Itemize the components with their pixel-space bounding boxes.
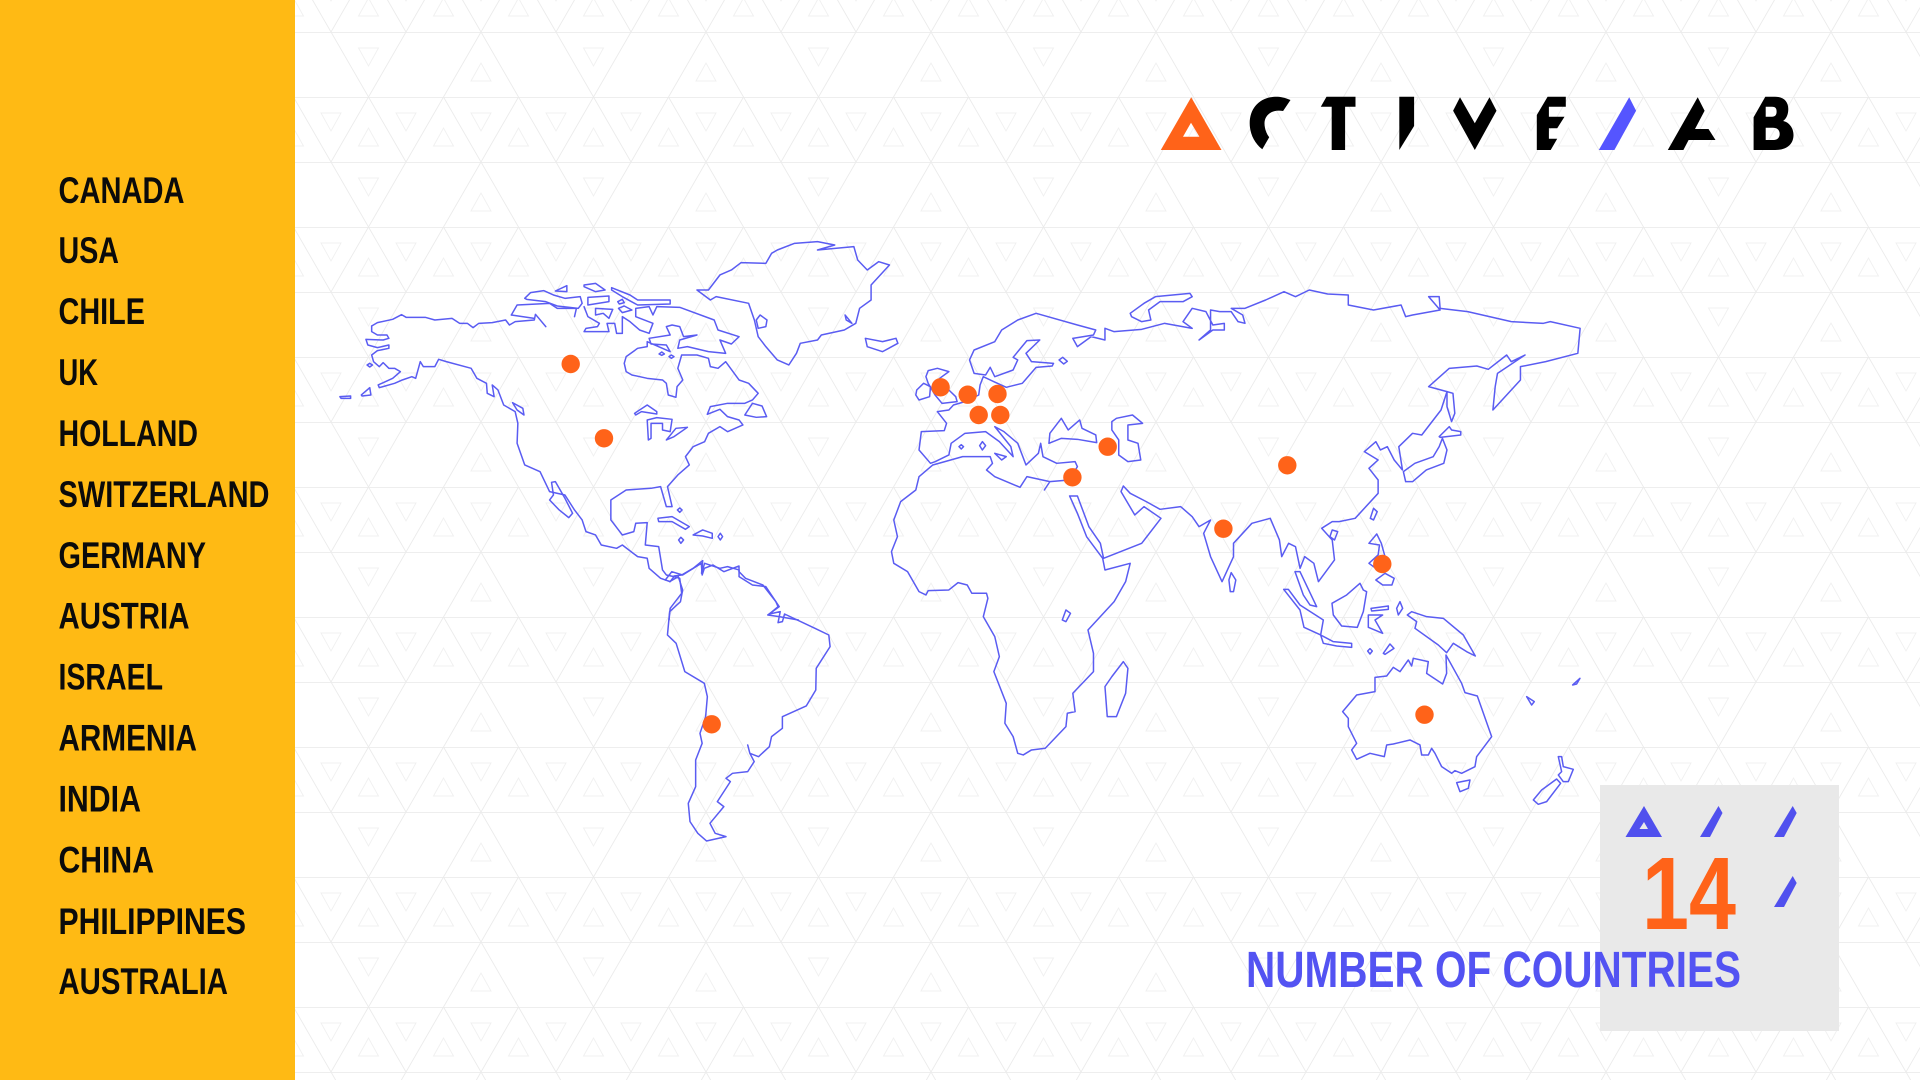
- letter shape: E: [1537, 97, 1566, 150]
- letter shape: I: [1399, 97, 1414, 150]
- marker: Austria: [991, 406, 1010, 424]
- country: Israel: ISRAEL: [58, 656, 163, 698]
- country: Australia: AUSTRALIA: [58, 961, 228, 1002]
- country: Germany: GERMANY: [58, 535, 206, 576]
- marker: USA: [595, 429, 613, 447]
- map: North America and Greenland: [340, 242, 898, 620]
- country: Philippines: PHILIPPINES: [58, 901, 246, 942]
- map: Eurasia and Africa: [891, 290, 1580, 755]
- marker: Australia: [1415, 706, 1434, 724]
- letter shape: C: [1250, 97, 1290, 149]
- logo: ActiveLab wordmark: [1161, 97, 1794, 150]
- icon: small triangle: [1626, 806, 1662, 837]
- letter shape: T: [1321, 97, 1356, 150]
- country: USA: USA: [58, 230, 119, 271]
- icon: logo triangle: [1161, 97, 1222, 150]
- letter shape: A: [1668, 97, 1716, 150]
- icon: slash two: [1774, 806, 1797, 837]
- letter shape: V: [1453, 97, 1496, 150]
- country: Holland: HOLLAND: [58, 413, 198, 454]
- map: Southeast Asia and Oceania: [1284, 572, 1580, 804]
- marker: Germany: [988, 385, 1007, 403]
- country: Austria: AUSTRIA: [58, 596, 190, 636]
- icon: blue slash: [1599, 97, 1636, 150]
- marker: Philippines: [1373, 555, 1392, 573]
- icon: slash one: [1700, 806, 1722, 837]
- stat label: NUMBER OF COUNTRIES: [1246, 941, 1741, 998]
- map markers: country locations: [562, 355, 1434, 734]
- marker: China: [1278, 456, 1297, 474]
- marker: Holland: [958, 386, 977, 404]
- marker: UK: [931, 378, 950, 396]
- marker: Canada: [562, 355, 580, 373]
- country: Canada: CANADA: [58, 170, 184, 211]
- marker: India: [1214, 520, 1233, 538]
- icon: slash three: [1774, 876, 1797, 907]
- stat number: 14: [1642, 836, 1736, 951]
- country: Chile: CHILE: [58, 291, 145, 332]
- letter shape: B: [1754, 97, 1794, 150]
- world map outline: [340, 242, 1580, 841]
- map: South America: [665, 563, 830, 841]
- marker: Switzerland: [970, 406, 988, 424]
- marker: Israel: [1063, 468, 1082, 486]
- marker: Chile: [702, 715, 721, 734]
- country: Armenia: ARMENIA: [58, 718, 197, 758]
- panel: stat card: [1600, 785, 1839, 1031]
- marker: Armenia: [1098, 438, 1117, 456]
- country: China: CHINA: [58, 840, 154, 880]
- country: UK: UK: [58, 352, 98, 393]
- country: Switzerland: SWITZERLAND: [58, 474, 270, 515]
- panel: country list sidebar: [0, 0, 295, 1080]
- country: India: INDIA: [58, 778, 141, 820]
